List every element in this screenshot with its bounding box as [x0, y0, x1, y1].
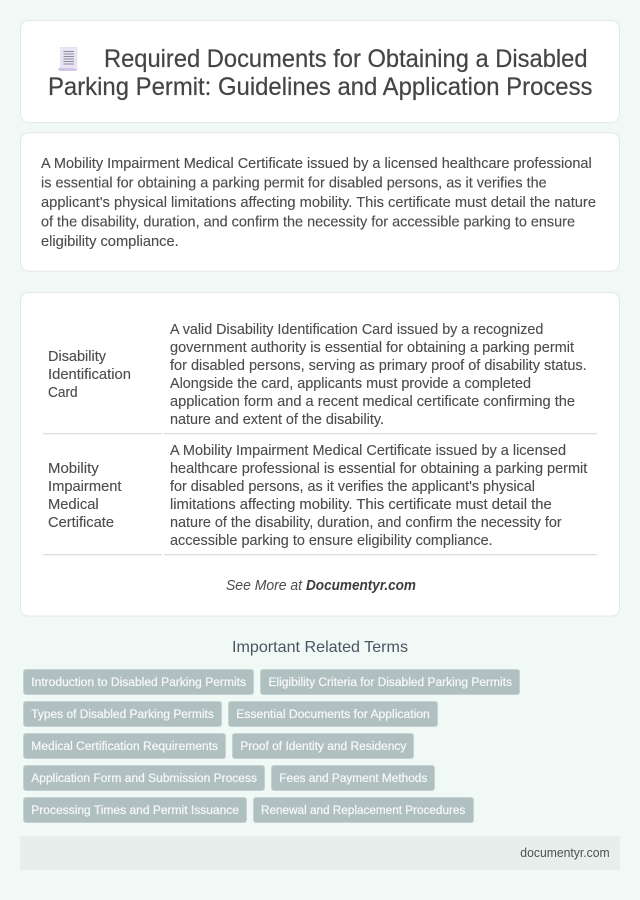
row label: Certificate	[48, 515, 114, 531]
row description: for disabled persons, as it verifies the applicant's physical	[170, 479, 535, 495]
tag	[228, 702, 438, 726]
tag: Renewal and Replacement Procedures	[261, 803, 465, 817]
tag	[24, 798, 246, 822]
tag: Application Form and Submission Process	[31, 771, 257, 785]
table row: Mobility Impairment Medical Certificate	[43, 443, 597, 555]
title: Parking Permit: Guidelines and Application Process	[48, 73, 592, 101]
title	[48, 45, 592, 101]
row label	[48, 349, 131, 401]
row description: nature of the disability, duration, and confirm the necessity for	[170, 515, 562, 531]
row description: application form and a recent medical certificate confirming the	[170, 394, 575, 410]
see more link: Documentyr.com	[306, 578, 416, 594]
tag: Fees and Payment Methods	[279, 771, 427, 785]
row description: A Mobility Impairment Medical Certificate issued by a licensed	[170, 443, 566, 459]
row description	[170, 443, 587, 549]
tag: Eligibility Criteria for Disabled Parking Permits	[268, 675, 512, 689]
heading: related terms: Important Related Terms	[232, 639, 408, 656]
row description: nature and extent of the disability.	[170, 412, 384, 428]
tag: Medical Certification Requirements	[31, 739, 218, 753]
row description: accessible parking to ensure eligibility compliance.	[170, 533, 493, 549]
row label: Mobility	[48, 461, 100, 477]
tag	[232, 734, 414, 758]
intro text: of the disability, duration, and confirm the necessity for accessible parking to ensure	[41, 214, 575, 230]
intro text	[41, 156, 596, 250]
footer: documentyr.com	[520, 846, 610, 860]
row label: Disability	[48, 349, 107, 365]
see more link	[226, 578, 416, 594]
row label: Impairment	[48, 479, 122, 495]
tag: Types of Disabled Parking Permits	[31, 707, 214, 721]
row description: healthcare professional is essential for obtaining a parking permit	[170, 461, 587, 477]
title: Required Documents for Obtaining a Disabled	[104, 45, 588, 73]
row label: Medical	[48, 497, 99, 513]
panel: documents table	[20, 292, 620, 616]
tag: Introduction to Disabled Parking Permits	[31, 675, 246, 689]
row description: A valid Disability Identification Card issued by a recognized	[170, 322, 543, 338]
intro text: is essential for obtaining a parking permit for disabled persons, as it verifies the	[41, 176, 547, 192]
row description: limitations affecting mobility. This certificate must detail the	[170, 497, 552, 513]
tag: Proof of Identity and Residency	[240, 739, 407, 753]
tag list	[24, 670, 520, 822]
intro text: A Mobility Impairment Medical Certificate issued by a licensed healthcare professional	[41, 156, 592, 172]
row description: for disabled persons, serving as primary proof of disability status.	[170, 358, 587, 374]
row label: Card	[48, 385, 78, 401]
tag	[24, 702, 222, 726]
tag: Essential Documents for Application	[236, 707, 430, 721]
panel: header	[20, 20, 620, 122]
panel: intro paragraph	[20, 133, 620, 271]
intro text: eligibility compliance.	[41, 234, 179, 250]
row description: government authority is essential for obtaining a parking permit	[170, 340, 574, 356]
row description: Alongside the card, applicants must provide a completed	[170, 376, 531, 392]
row label	[48, 461, 122, 531]
row label: Identification	[48, 367, 131, 383]
see more link: See More at	[226, 578, 303, 594]
footer	[20, 836, 620, 870]
tag	[260, 670, 520, 694]
tag	[254, 798, 474, 822]
icon: document scroll	[58, 48, 78, 71]
table row: Disability Identification Card	[43, 322, 597, 434]
row description	[170, 322, 587, 428]
tag	[272, 766, 434, 790]
tag: Processing Times and Permit Issuance	[31, 803, 239, 817]
tag	[24, 670, 254, 694]
intro text: applicant's physical limitations affecting mobility. This certificate must detail the nature	[41, 195, 596, 211]
tag	[24, 734, 226, 758]
tag	[24, 766, 264, 790]
